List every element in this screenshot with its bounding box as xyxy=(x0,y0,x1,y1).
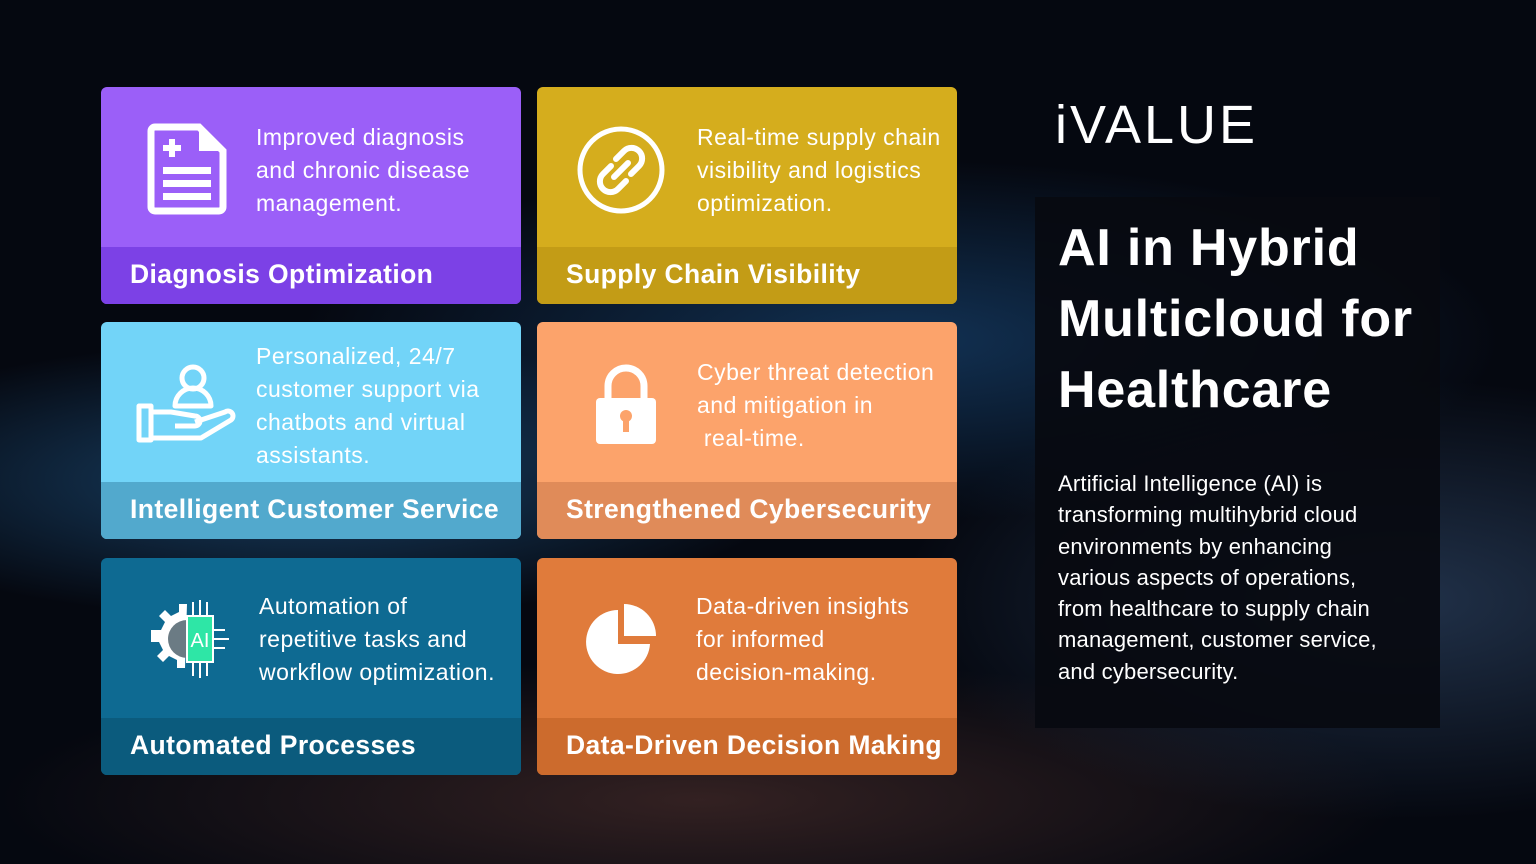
footer label: Intelligent Customer Service xyxy=(130,494,499,524)
description xyxy=(1058,471,1377,684)
footer label xyxy=(537,718,957,775)
card: Supply Chain Visibility xyxy=(537,87,957,304)
icon: pie chart xyxy=(586,604,656,674)
title xyxy=(1058,219,1413,419)
card: Strengthened Cybersecurity xyxy=(537,322,957,539)
footer label: Supply Chain Visibility xyxy=(566,259,860,289)
description: environments by enhancing xyxy=(1058,534,1332,559)
description: and cybersecurity. xyxy=(1058,659,1238,684)
footer label: Strengthened Cybersecurity xyxy=(566,494,931,524)
text: chatbots and virtual xyxy=(256,409,465,435)
footer label xyxy=(537,247,957,304)
text: Personalized, 24/7 xyxy=(256,343,456,369)
text xyxy=(259,593,495,685)
footer label xyxy=(101,718,521,775)
card: Diagnosis Optimization xyxy=(101,87,521,304)
text: Data-driven insights xyxy=(696,593,909,619)
text xyxy=(256,124,470,216)
text: repetitive tasks and xyxy=(259,626,467,652)
card: Automated Processes xyxy=(101,558,521,775)
title: Multicloud for xyxy=(1058,290,1413,348)
text: customer support via xyxy=(256,376,479,402)
text: and mitigation in xyxy=(697,392,873,418)
icon: AI gear chip: AI xyxy=(191,630,209,652)
description: various aspects of operations, xyxy=(1058,565,1356,590)
text: optimization. xyxy=(697,190,833,216)
description: transforming multihybrid cloud xyxy=(1058,502,1357,527)
title: AI in Hybrid xyxy=(1058,219,1359,277)
card: Data-Driven Decision Making xyxy=(537,558,957,775)
text: assistants. xyxy=(256,442,370,468)
icon: hand with person xyxy=(136,364,236,442)
text: Cyber threat detection xyxy=(697,359,934,385)
text: for informed xyxy=(696,626,825,652)
text: real-time. xyxy=(704,425,805,451)
footer label xyxy=(101,482,521,539)
icon: lock xyxy=(596,364,656,444)
footer label xyxy=(101,247,521,304)
text xyxy=(696,593,909,685)
text: visibility and logistics xyxy=(697,157,921,183)
description: Artificial Intelligence (AI) is xyxy=(1058,471,1322,496)
description: from healthcare to supply chain xyxy=(1058,596,1370,621)
title: Healthcare xyxy=(1058,361,1332,419)
text: Automation of xyxy=(259,593,407,619)
text: Improved diagnosis xyxy=(256,124,464,150)
panel: title and description xyxy=(1035,197,1440,728)
footer label xyxy=(537,482,957,539)
icon: link xyxy=(578,126,664,214)
text: workflow optimization. xyxy=(259,659,495,685)
text: decision-making. xyxy=(696,659,877,685)
text: and chronic disease xyxy=(256,157,470,183)
footer label: Diagnosis Optimization xyxy=(130,259,433,289)
text xyxy=(697,124,941,216)
icon: document xyxy=(148,124,226,214)
footer label: Data-Driven Decision Making xyxy=(566,730,942,760)
text: Real-time supply chain xyxy=(697,124,941,150)
text xyxy=(256,343,480,468)
footer label: Automated Processes xyxy=(130,730,416,760)
text: management. xyxy=(256,190,402,216)
card: Intelligent Customer Service xyxy=(101,322,521,539)
description: management, customer service, xyxy=(1058,627,1377,652)
logo: iVALUE: iVALUE xyxy=(1055,95,1258,155)
icon: AI gear chip xyxy=(151,600,229,678)
text xyxy=(697,359,934,451)
